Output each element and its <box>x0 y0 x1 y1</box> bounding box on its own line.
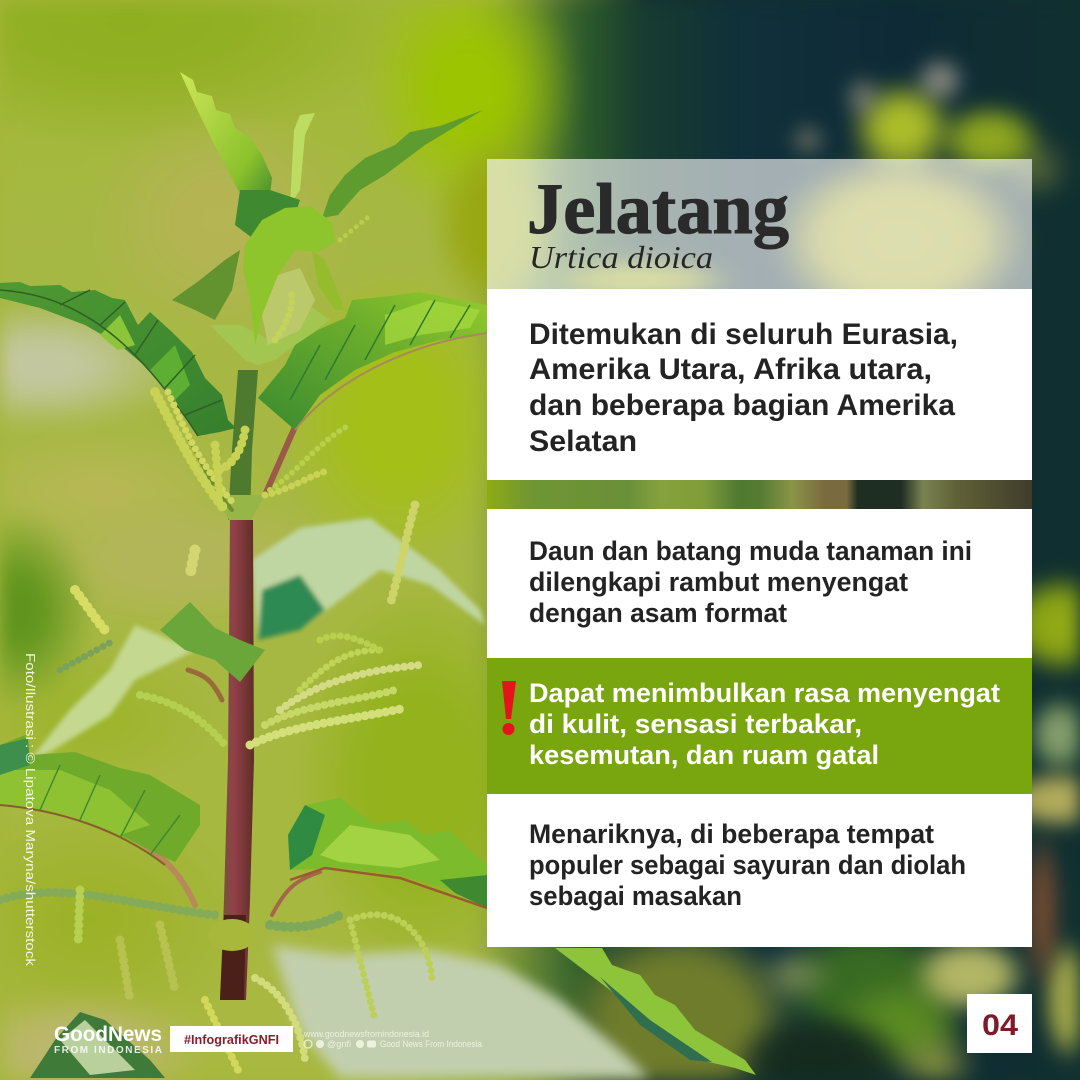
footer logo: FROM INDONESIA <box>54 1045 162 1056</box>
panel: warning <box>487 658 1032 794</box>
panel: culinary use: populer sebagai sayuran dan diolah <box>529 850 966 880</box>
footer social links: www.goodnewsfromindonesia.id <box>303 1029 429 1039</box>
panel: culinary use <box>487 794 1032 947</box>
panel: culinary use: sebagai masakan <box>529 881 742 911</box>
leaf: lower left <box>0 735 200 865</box>
scientific name: Urtica dioica <box>529 239 713 275</box>
footer logo <box>54 1023 162 1056</box>
footer social links: Good News From Indonesia <box>380 1039 482 1049</box>
catkins: flower beads <box>0 214 432 1070</box>
heading: Jelatang <box>527 169 789 249</box>
icon: exclamation mark <box>502 681 516 735</box>
panel: stinging hairs: dengan asam format <box>529 598 787 628</box>
page number <box>967 994 1032 1053</box>
panel: title <box>487 159 1032 289</box>
hashtag badge: #InfografikGNFI <box>184 1033 279 1047</box>
leaf: lower right <box>288 798 487 908</box>
blurred gap between panels <box>487 480 1032 509</box>
leaf: left large <box>0 282 236 436</box>
stem <box>215 370 265 1000</box>
footer logo: GoodNews <box>54 1023 162 1046</box>
bud <box>290 113 315 205</box>
pale blurred left leaf <box>30 625 195 760</box>
footer social links <box>303 1029 482 1049</box>
petioles <box>130 420 320 915</box>
panel: warning: di kulit, sensasi terbakar, <box>529 709 862 739</box>
hashtag badge <box>170 1026 293 1052</box>
panel: stinging hairs: Daun dan batang muda tanaman ini <box>529 536 972 566</box>
pale blurred lower leaf <box>272 945 650 1078</box>
panel: distribution: Ditemukan di seluruh Eurasia, <box>529 318 958 351</box>
panel: distribution <box>487 289 1032 480</box>
photo credit: Foto/Ilustrasi : © Lipatova Maryna/shutterstock <box>23 653 37 967</box>
panel: stinging hairs: dilengkapi rambut menyengat <box>529 567 908 597</box>
leaf: bottom left of footer <box>30 1012 165 1078</box>
pale blurred upper right leaf <box>252 518 485 640</box>
leaf: young centre <box>262 268 315 345</box>
small middle leaf <box>160 602 265 682</box>
leaf: below panel <box>555 948 756 1075</box>
young base <box>210 295 330 365</box>
centre cluster <box>235 190 300 240</box>
small dark leaf <box>172 250 240 320</box>
leaf: right large <box>258 292 487 430</box>
panel: warning: kesemutan, dan ruam gatal <box>529 740 879 770</box>
leaf: top right <box>322 110 483 218</box>
panel: culinary use: Menariknya, di beberapa tempat <box>529 819 934 849</box>
panel: distribution: Selatan <box>529 425 637 458</box>
stem node <box>208 919 256 951</box>
page number: 04 <box>982 1009 1018 1042</box>
footer social links: @gnfi <box>327 1039 351 1049</box>
plant: nettle stem and leaves <box>0 72 756 1078</box>
panel: warning: Dapat menimbulkan rasa menyengat <box>529 678 1000 708</box>
panel: stinging hairs <box>487 509 1032 658</box>
panel: distribution: dan beberapa bagian Amerika <box>529 389 955 422</box>
leaf: top centre <box>180 72 272 205</box>
panel: distribution: Amerika Utara, Afrika utara, <box>529 353 932 386</box>
